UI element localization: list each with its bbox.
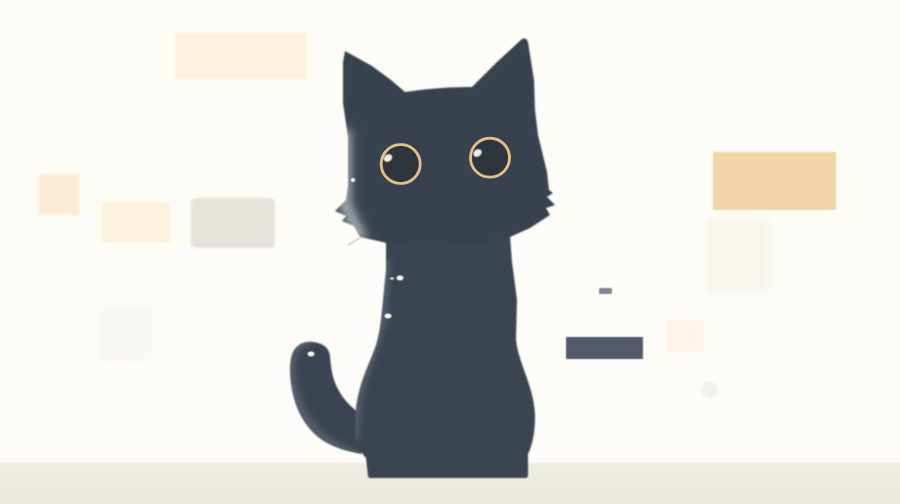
cat whisker [348, 238, 360, 245]
cat [290, 38, 555, 478]
cat tail [290, 340, 362, 456]
floor [0, 463, 900, 504]
block: left peach [102, 202, 170, 243]
block: top peach [175, 33, 306, 79]
right eye [470, 138, 510, 177]
block: small dark tick [599, 288, 612, 294]
block: faint grey right [707, 218, 769, 292]
block: grey [191, 198, 275, 248]
left eye [381, 144, 420, 184]
dot: faint grey [702, 382, 718, 398]
block: orange [713, 152, 836, 210]
fur highlights [308, 178, 404, 356]
block: pale peach [665, 320, 703, 352]
block: small left peach [39, 174, 79, 215]
cat head [335, 38, 555, 248]
block: faint grey lower left [100, 307, 152, 361]
cat body [354, 236, 535, 478]
right eye highlight [472, 148, 483, 158]
block: dark bar [566, 337, 643, 359]
left eye highlight [382, 153, 394, 163]
